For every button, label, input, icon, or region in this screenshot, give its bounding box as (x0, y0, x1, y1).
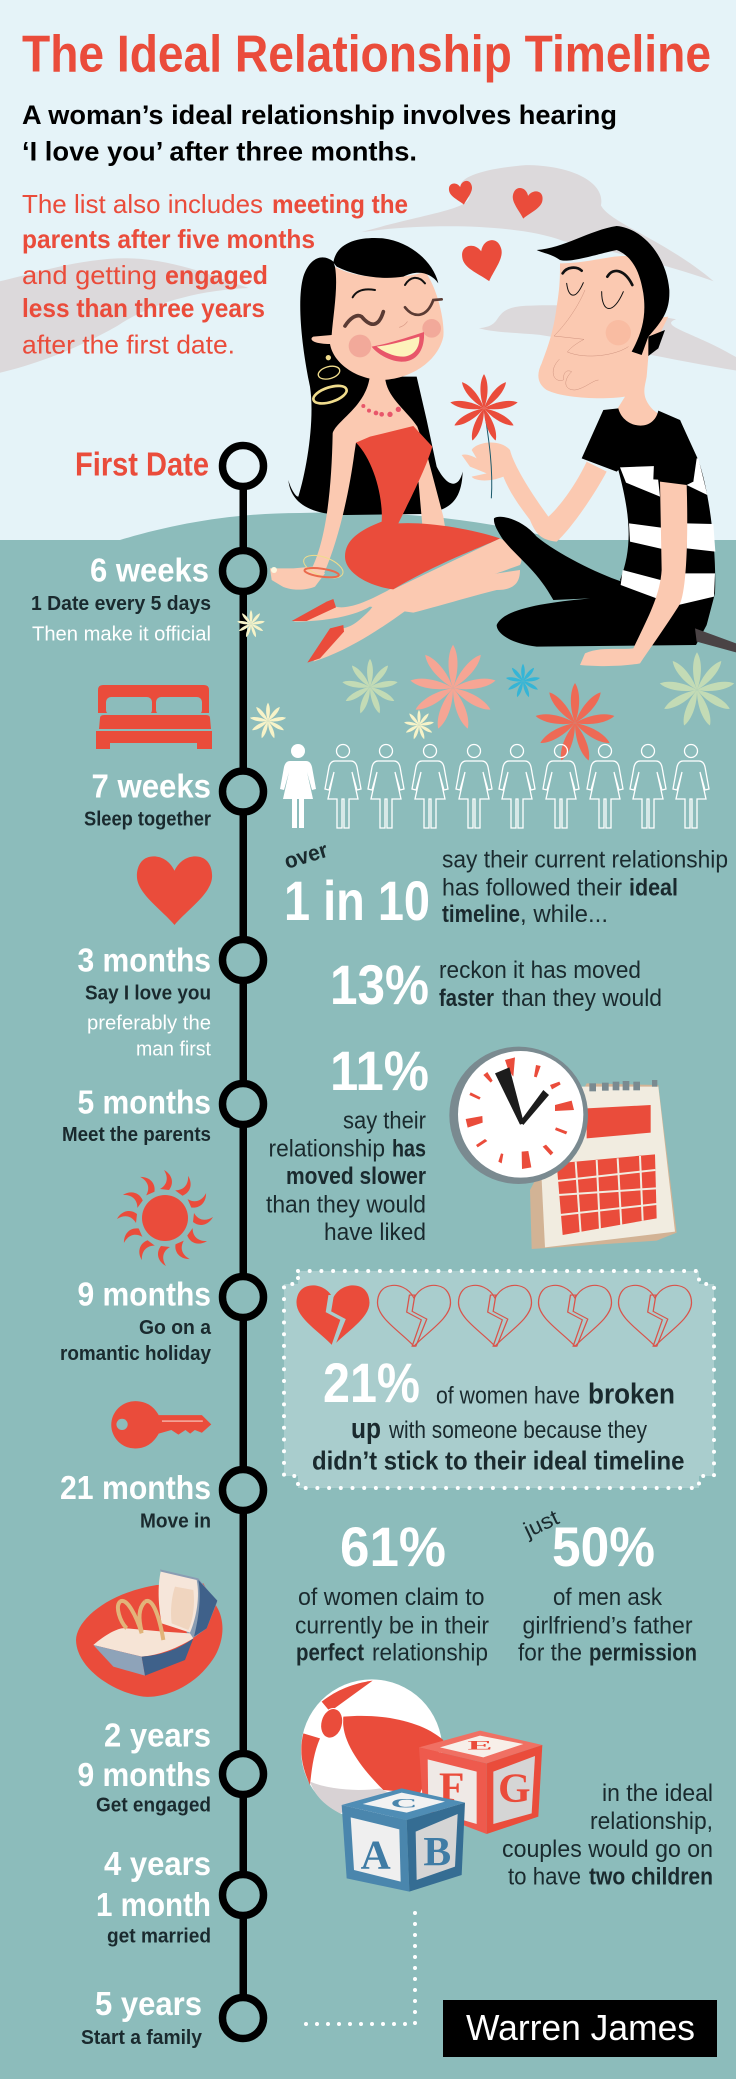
label: 21 months (60, 1469, 211, 1533)
label: 3 months: man first (136, 1038, 211, 1060)
block A B C: A (361, 1832, 391, 1878)
subtitle: ‘I love you’ after three months. (22, 137, 417, 167)
stat: 61%: relationship (372, 1640, 488, 1666)
stat: 21%: of women have (436, 1382, 580, 1410)
intro paragraph: less than three years (22, 293, 265, 323)
man: shirt (582, 408, 715, 625)
icon: ring box (76, 1569, 222, 1697)
stat: 11% (266, 1039, 429, 1246)
beach ball (301, 1679, 443, 1821)
icon: sun (117, 1170, 213, 1266)
label: 6 weeks (31, 552, 211, 646)
man: sleeve (653, 420, 697, 482)
stat: 1 in 10: , while... (520, 901, 608, 928)
flower held (450, 374, 518, 498)
man: shadow foot (695, 628, 736, 652)
stat: 13%: than they would (502, 985, 662, 1012)
stat: 13%: reckon it has moved (439, 957, 641, 984)
text: two children: relationship, (590, 1808, 713, 1835)
stat: 61%: of women claim to (298, 1584, 484, 1611)
label: 9 months (60, 1275, 212, 1365)
timeline nodes (222, 446, 264, 2038)
label: 4 years 1 month: 1 month (96, 1886, 211, 1923)
woman: face features (345, 278, 442, 357)
stat: 50%: of men ask (553, 1584, 663, 1611)
label: 9 months: Go on a (139, 1317, 212, 1339)
stat: 13%: faster (439, 985, 494, 1012)
intro paragraph: meeting the (272, 189, 408, 219)
ground: teal hill (0, 513, 736, 2079)
label: 9 months: 9 months (78, 1275, 211, 1312)
label: 5 months: 5 months (78, 1083, 211, 1120)
label: 6 weeks: 6 weeks (90, 552, 209, 589)
label: 7 weeks: 7 weeks (92, 767, 211, 804)
woman: top hair (333, 238, 438, 283)
woman: chest and neck (313, 375, 447, 573)
woman: hand and bracelets (270, 567, 325, 590)
stat: 1 in 10: say their current relationship (442, 846, 728, 873)
calendar (530, 1080, 677, 1249)
logo: Warren James (443, 2000, 717, 2057)
stat: 11%: have liked (324, 1219, 426, 1246)
man: face features (553, 268, 632, 390)
illustration: couple (270, 226, 736, 666)
woman: lower leg (293, 570, 520, 622)
block E F G: G (498, 1766, 531, 1812)
timeline line (240, 466, 247, 2018)
icon: key (111, 1401, 211, 1449)
label: 2 years 9 months: 9 months (78, 1756, 211, 1793)
clock (449, 1047, 588, 1184)
man: holding arm (462, 442, 607, 542)
stat: 61%: 61% (340, 1515, 446, 1578)
woman: mouth (372, 332, 424, 362)
woman: necklace (361, 404, 401, 417)
stat: 50%: 50% (552, 1515, 655, 1578)
stat: 11%: than they would (266, 1192, 426, 1218)
stat: 21%: with someone because they (388, 1417, 647, 1444)
label: 3 months: 3 months (78, 941, 211, 978)
label: 6 weeks: Then make it official (32, 624, 211, 646)
block E F G (419, 1731, 542, 1834)
label: 4 years 1 month (96, 1845, 211, 1948)
label: 3 months: preferably the (87, 1012, 211, 1034)
stat: 50%: just (519, 1505, 563, 1543)
label: 4 years 1 month: get married (107, 1926, 211, 1948)
stat: 11%: relationship (268, 1136, 385, 1163)
panel: broken hearts (284, 1271, 714, 1488)
block E F G: E (468, 1738, 492, 1753)
stat: 21%: didn’t stick to their ideal timeline (312, 1446, 684, 1476)
label: 2 years 9 months: Get engaged (96, 1795, 211, 1817)
icon: beach ball and blocks (301, 1679, 542, 1892)
block A B C: C (391, 1796, 417, 1811)
woman: upper leg (313, 538, 521, 662)
stat: 1 in 10: 1 in 10 (284, 869, 430, 932)
stat: 21% (312, 1351, 684, 1476)
man: shirt stripes (620, 458, 715, 605)
label: 3 months (78, 941, 211, 1060)
label: 7 weeks: Sleep together (84, 808, 211, 830)
stat: 13%: 13% (330, 953, 429, 1016)
label: 5 months: Meet the parents (62, 1124, 211, 1146)
stat: 50%: for the (518, 1640, 582, 1666)
text: two children: couples would go on (502, 1836, 713, 1863)
label: 21 months: Move in (140, 1511, 211, 1533)
text: two children: two children (589, 1864, 713, 1891)
icon: filled broken heart (296, 1285, 370, 1346)
icon: calendar and clock (449, 1047, 677, 1249)
label: 21 months: 21 months (60, 1469, 211, 1506)
intro paragraph: and getting (22, 260, 157, 290)
man: right arm (580, 482, 687, 666)
label: 9 months: romantic holiday (60, 1343, 212, 1365)
stat: 61%: currently be in their (295, 1613, 489, 1640)
stat: 13% (330, 953, 662, 1016)
label: 5 months (62, 1083, 211, 1146)
block A B C: B (423, 1829, 451, 1875)
label: 5 years (81, 1985, 203, 2049)
label: 7 weeks (84, 767, 211, 830)
label: 6 weeks: 1 Date every 5 days (31, 593, 211, 615)
man: hair (537, 226, 669, 355)
pictogram: ten women (280, 744, 709, 828)
stat: 11%: 11% (330, 1039, 429, 1102)
block E F G: F (439, 1765, 464, 1811)
icons: outlined broken hearts (378, 1285, 692, 1346)
stat: 61%: perfect (296, 1640, 364, 1666)
ground flowers (237, 610, 735, 762)
stat: 11%: moved slower (286, 1163, 426, 1190)
stat: 50%: girlfriend’s father (522, 1613, 692, 1640)
woman: head (311, 267, 444, 380)
intro paragraph: after the first date. (22, 330, 235, 360)
label: 2 years 9 months (78, 1717, 211, 1817)
clouds (0, 165, 736, 373)
stat: 11%: say their (343, 1108, 426, 1135)
stat: 1 in 10: over (281, 837, 331, 874)
icon: heart (137, 856, 212, 925)
stat: 1 in 10: has followed their (442, 874, 622, 902)
text: two children (502, 1780, 713, 1891)
subtitle: A woman’s ideal relationship involves hearing (22, 100, 617, 130)
stat: 1 in 10: ideal (629, 874, 678, 902)
stat: 1 in 10: timeline (442, 901, 520, 928)
label: 4 years 1 month: 4 years (104, 1845, 211, 1882)
man: neck and face (538, 256, 668, 428)
woman: dress (345, 426, 500, 589)
icon: floating hearts (448, 180, 544, 286)
intro paragraph: The list also includes (22, 189, 263, 219)
text: two children: to have (508, 1864, 581, 1891)
stat: 21%: up (351, 1413, 381, 1445)
stat: 61% (295, 1515, 489, 1666)
intro paragraph: parents after five months (22, 224, 315, 254)
woman: back hair (288, 257, 463, 515)
logo: Warren James: Warren James (466, 2007, 695, 2048)
label: 5 years: Start a family (81, 2027, 203, 2049)
stat: 21%: 21% (323, 1351, 420, 1414)
label: First Date: First Date (75, 445, 209, 482)
woman: shoes (292, 599, 344, 663)
intro paragraph (22, 189, 408, 360)
stat: 1 in 10 (281, 837, 728, 932)
intro paragraph: engaged (165, 260, 268, 290)
stat: 50% (518, 1505, 697, 1666)
icon: bed (96, 685, 212, 749)
block A B C (342, 1788, 465, 1892)
label: 5 years: 5 years (95, 1985, 202, 2022)
stat: 50%: permission (589, 1640, 697, 1666)
stat: 21%: broken (588, 1378, 675, 1410)
label: 2 years 9 months: 2 years (104, 1717, 211, 1754)
stat: 11%: has (392, 1136, 426, 1163)
subtitle (22, 100, 617, 167)
woman: earrings (311, 355, 349, 407)
dotted connector (296, 1913, 415, 2024)
man: pants (494, 517, 707, 647)
label: 3 months: Say I love you (85, 983, 211, 1005)
text: two children: in the ideal (602, 1780, 713, 1807)
